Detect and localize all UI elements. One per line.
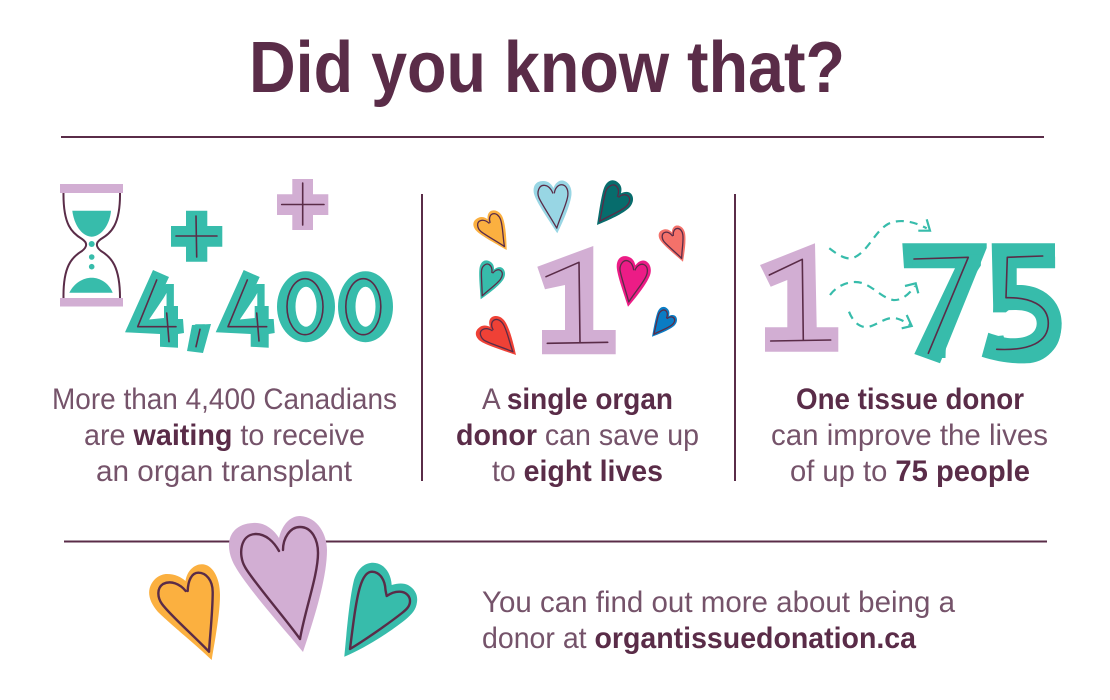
big number 75: 75 xyxy=(905,222,1067,392)
panel: tissue donor xyxy=(758,219,1067,488)
arrow: dashed top xyxy=(829,219,930,258)
big number 4,400 xyxy=(125,245,393,364)
big number 1: 1 xyxy=(536,225,614,382)
icon: red heart xyxy=(472,312,523,368)
big number 4,400: 0 xyxy=(342,260,389,356)
panel: organ donor xyxy=(456,176,699,488)
big number 1: 1 xyxy=(758,222,836,379)
icon: teal heart xyxy=(464,256,509,303)
panel: waiting list xyxy=(52,179,397,488)
text: organ donor: to eight lives xyxy=(492,455,663,488)
icon: large orange heart xyxy=(149,564,220,660)
text: tissue donor: One tissue donor xyxy=(796,383,1024,416)
icon: coral heart xyxy=(658,224,689,265)
big number 4,400: 4 xyxy=(227,265,276,364)
icon: orange heart xyxy=(471,208,514,258)
text: tissue donor: of up to 75 people xyxy=(790,455,1030,488)
big number 4,400: , xyxy=(186,245,214,357)
icon: teal plus xyxy=(171,211,222,262)
text: waiting list: More than 4,400 Canadians xyxy=(52,383,397,416)
text: organ donor: A single organ xyxy=(482,383,673,416)
title: Did you know that? xyxy=(249,28,845,108)
text: tissue donor xyxy=(771,383,1048,488)
text: find out more xyxy=(482,586,955,655)
text: find out more: You can find out more about being a xyxy=(482,586,955,619)
text: waiting list xyxy=(52,383,397,488)
icon: hourglass xyxy=(60,184,123,306)
icon: large teal heart xyxy=(344,563,417,657)
arrow: dashed middle xyxy=(830,282,918,300)
icon: light blue heart xyxy=(529,177,573,234)
text: find out more: donor at organtissuedonation.ca xyxy=(482,622,916,655)
big number 4,400: 4 xyxy=(136,265,185,364)
big number 4,400: 0 xyxy=(282,260,330,356)
icon: pink heart xyxy=(603,251,654,310)
text: waiting list: are waiting to receive xyxy=(84,419,365,452)
arrow: dashed bottom xyxy=(849,312,912,328)
panel: footer xyxy=(149,516,955,660)
icon: dark teal heart xyxy=(580,176,637,231)
text: organ donor: donor can save up xyxy=(456,419,699,452)
icon: blue heart xyxy=(641,304,680,341)
icon: large purple heart xyxy=(229,516,327,652)
text: tissue donor: can improve the lives xyxy=(771,419,1048,452)
icon: purple plus xyxy=(277,179,328,230)
text: organ donor xyxy=(456,383,699,488)
text: waiting list: an organ transplant xyxy=(96,455,353,488)
